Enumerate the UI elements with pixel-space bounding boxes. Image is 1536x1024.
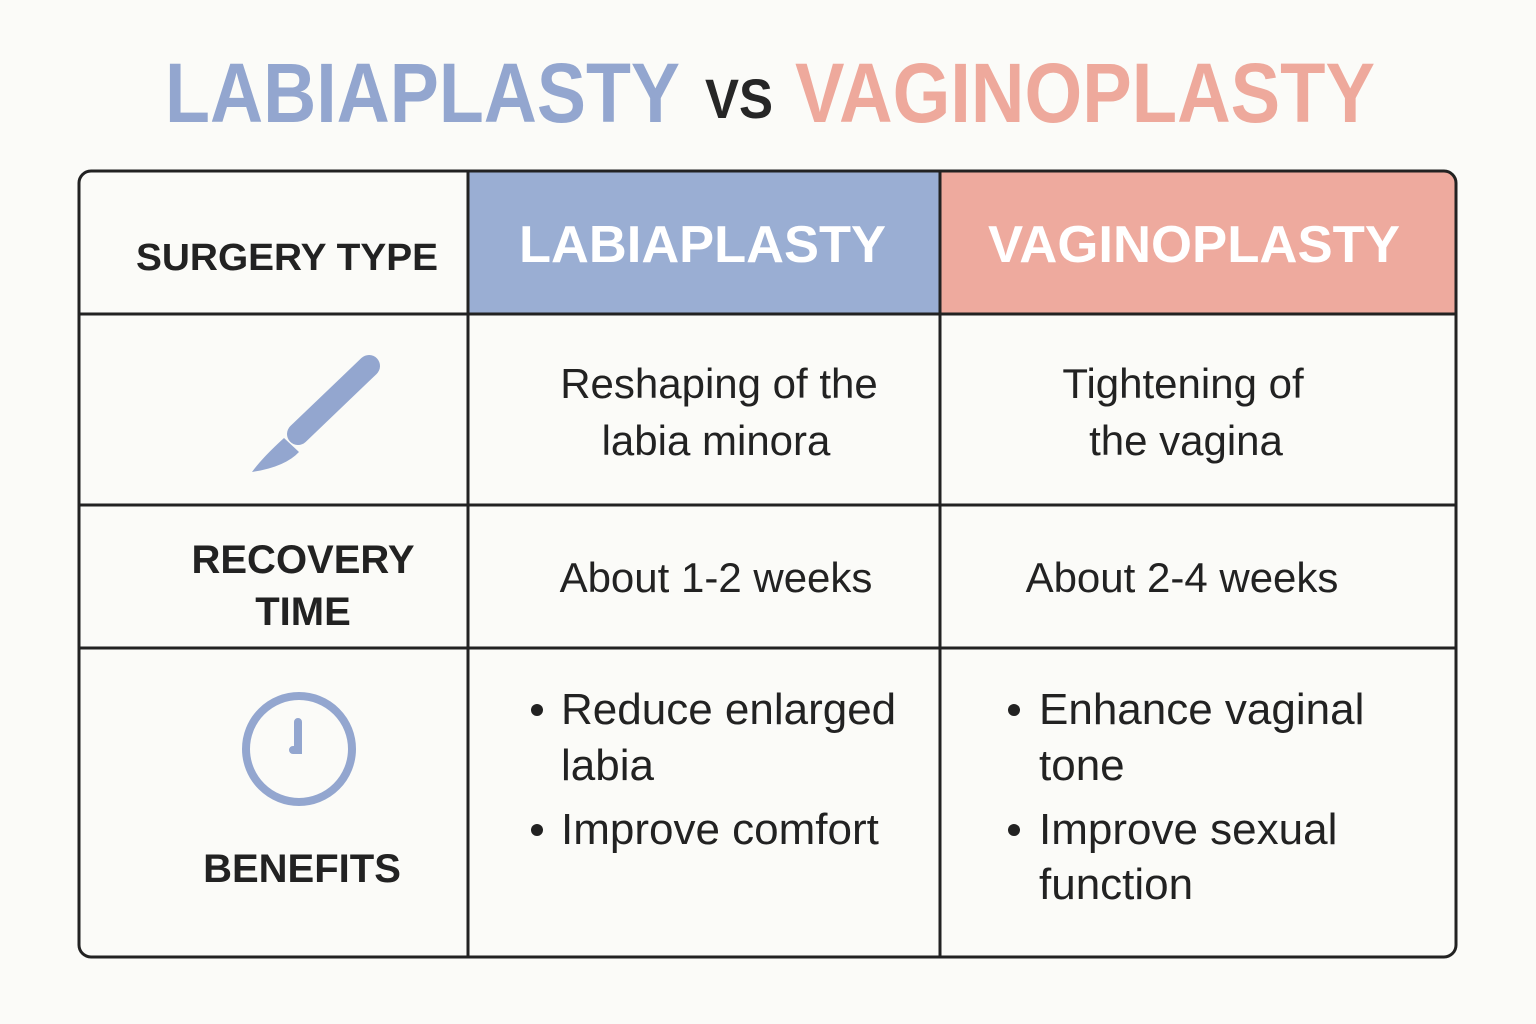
description: vaginoplasty xyxy=(1062,360,1304,464)
description: labiaplasty: labia minora xyxy=(602,417,831,464)
header: labiaplasty: LABIAPLASTY xyxy=(519,216,886,274)
recovery: vaginoplasty: About 2-4 weeks xyxy=(1026,554,1338,601)
icon: clock xyxy=(246,696,352,802)
row label: recovery time: RECOVERY xyxy=(191,538,415,582)
benefits: labiaplasty: Improve comfort xyxy=(561,805,879,854)
benefits: vaginoplasty: Enhance vaginal xyxy=(1039,685,1364,734)
description: vaginoplasty: Tightening of xyxy=(1062,360,1304,407)
row label: surgery type: SURGERY TYPE xyxy=(136,237,438,279)
benefits: vaginoplasty: function xyxy=(1039,860,1193,909)
title: VAGINOPLASTY xyxy=(795,46,1375,140)
table grid xyxy=(79,171,1456,957)
benefits: vaginoplasty: tone xyxy=(1039,741,1125,790)
row label: recovery time: TIME xyxy=(255,590,351,634)
benefits: labiaplasty: labia xyxy=(561,741,654,790)
benefits: labiaplasty: Reduce enlarged xyxy=(561,685,896,734)
row label: benefits: BENEFITS xyxy=(203,847,401,891)
description: labiaplasty: Reshaping of the xyxy=(560,360,878,407)
header: labiaplasty xyxy=(468,171,940,314)
icon: scalpel xyxy=(252,366,369,472)
recovery: labiaplasty: About 1-2 weeks xyxy=(560,554,872,601)
benefits: vaginoplasty xyxy=(1008,685,1364,909)
benefits: vaginoplasty: Improve sexual xyxy=(1039,805,1337,854)
benefits: labiaplasty xyxy=(531,685,896,854)
title: VS xyxy=(705,67,773,130)
title xyxy=(165,46,1375,140)
description: vaginoplasty: the vagina xyxy=(1089,417,1284,464)
description: labiaplasty xyxy=(560,360,878,464)
comparison table xyxy=(79,171,1456,957)
header: vaginoplasty xyxy=(940,171,1455,314)
row label: recovery time xyxy=(191,538,415,634)
title: LABIAPLASTY xyxy=(165,46,680,140)
header: vaginoplasty: VAGINOPLASTY xyxy=(988,216,1400,274)
